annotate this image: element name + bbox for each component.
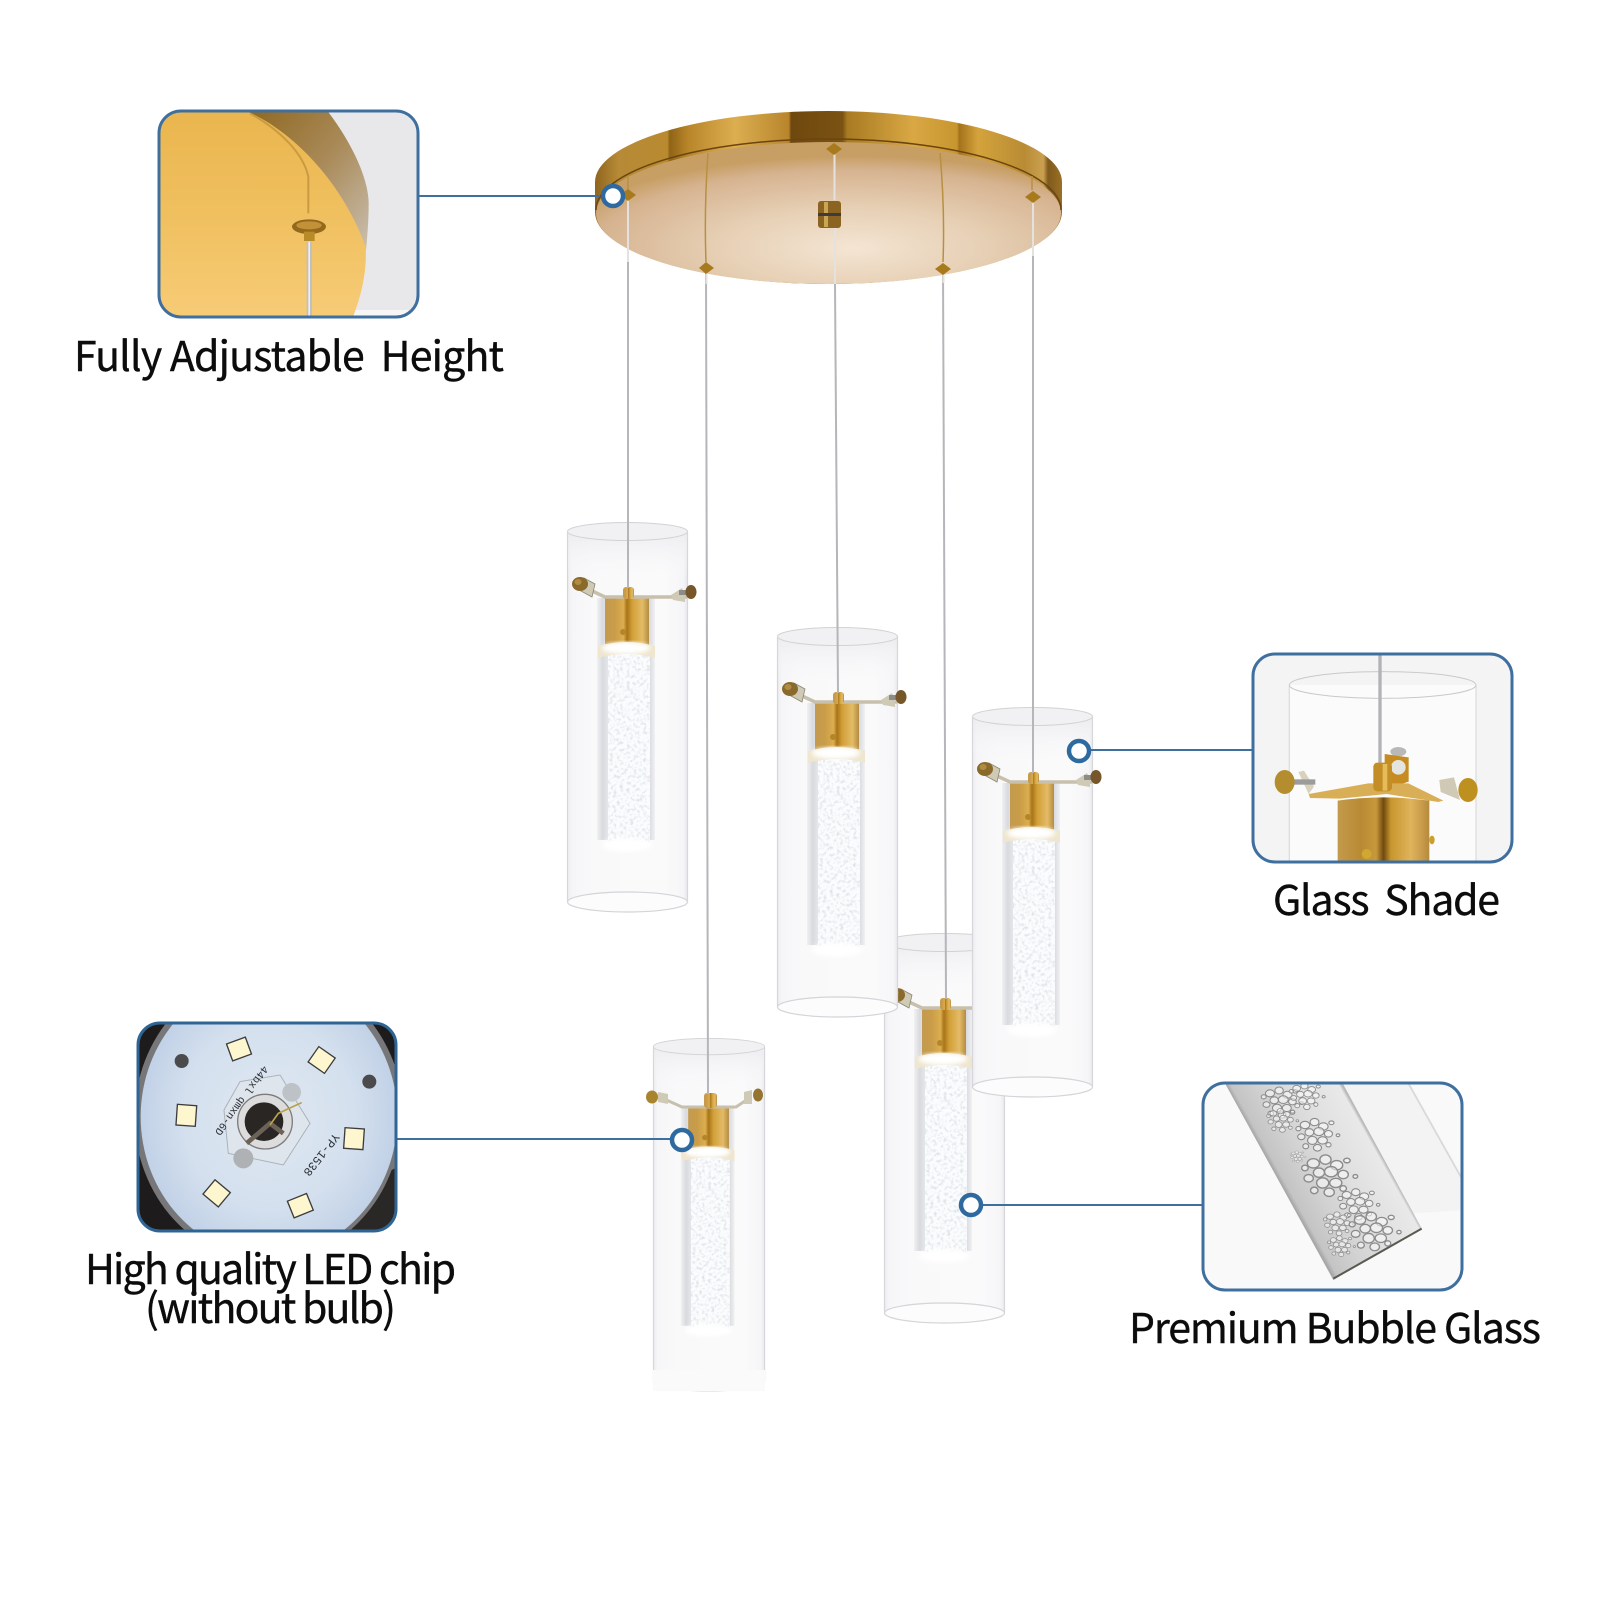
board markings [211, 1063, 342, 1178]
ceiling canopy plate [595, 111, 1062, 284]
board markings: 44bxl qmxn-6D [211, 1063, 270, 1137]
pendant light 5 [646, 267, 765, 1391]
pendant 5 bracket [646, 1088, 763, 1108]
panel: LED chip photo [136, 1022, 398, 1232]
heading: high quality LED chip: (without bulb) [145, 1275, 396, 1335]
pendant light 3 [972, 197, 1102, 1097]
panel: fully adjustable height photo [157, 108, 423, 322]
heading: premium bubble glass: Premium Bubble Glass [1129, 1295, 1541, 1355]
panel: premium bubble glass photo [1202, 1080, 1465, 1293]
panel: glass shade photo [1250, 653, 1517, 867]
connector: bubble glass [961, 1195, 1203, 1215]
pendant light 4 (rear, partly hidden) [884, 269, 1014, 1323]
bubbles [1261, 1083, 1401, 1257]
pendant light 2 [777, 148, 906, 1017]
heading: glass shade: Glass Shade [1273, 867, 1500, 927]
connector: LED chip [396, 1130, 692, 1150]
connector: canopy to height panel [418, 186, 623, 206]
cords crossing the plate [628, 152, 1033, 284]
heading: high quality LED chip: High quality LED chip [85, 1236, 456, 1296]
cord anchors [620, 143, 1041, 275]
center mount [818, 201, 841, 228]
heading: high quality LED chip [85, 1236, 456, 1335]
canopy rim [595, 111, 1062, 284]
canopy underside [596, 142, 1061, 284]
LED chips [176, 1037, 364, 1218]
board markings: YP-1538 [300, 1130, 342, 1178]
pendant light 1 [567, 194, 696, 912]
heading: fully adjustable height: Fully Adjustable Height [74, 323, 504, 383]
connector: glass shade [1069, 741, 1253, 761]
